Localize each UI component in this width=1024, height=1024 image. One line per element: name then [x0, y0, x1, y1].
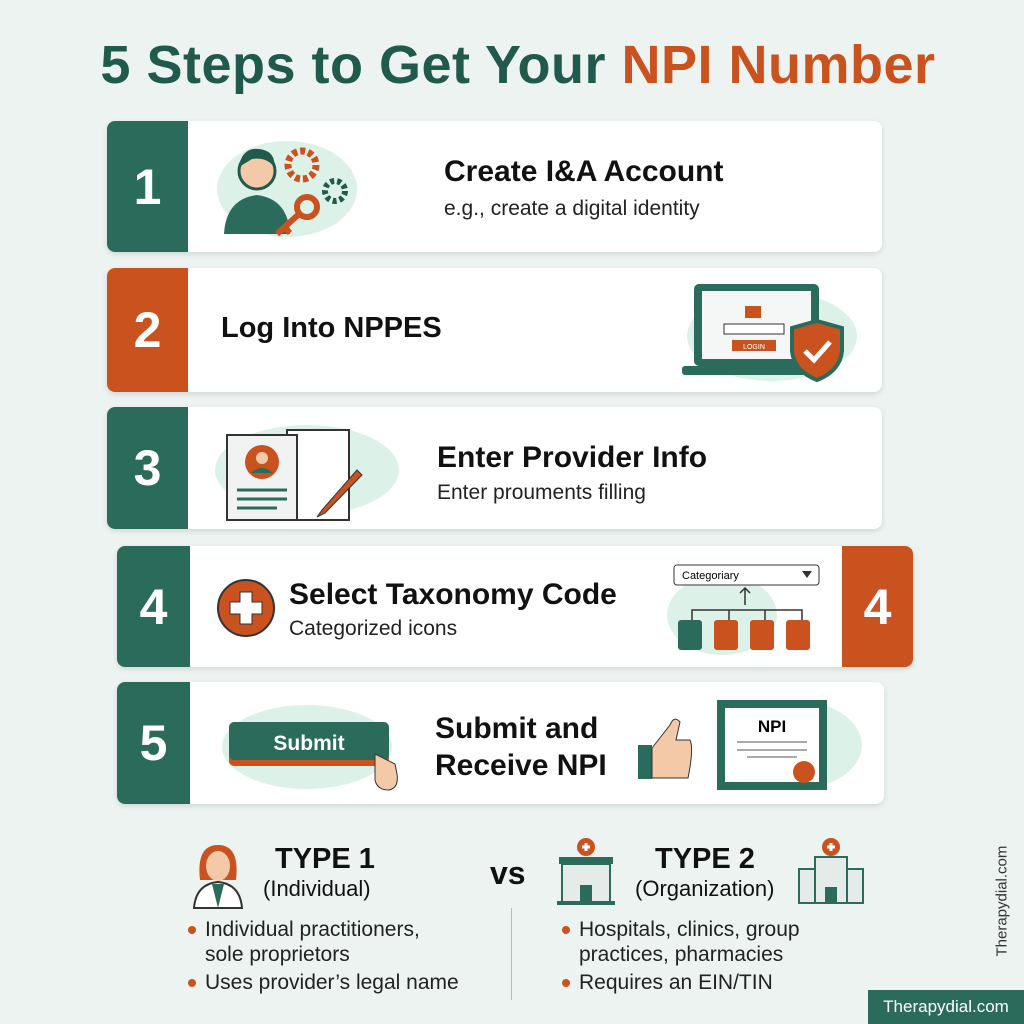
icon: hospital right — [798, 838, 864, 904]
bullets type 1: Individual practitioners, — [205, 918, 420, 941]
icon: hospital left — [557, 838, 615, 905]
bullets type 1: sole proprietors — [205, 943, 350, 966]
panel: type 1: (Individual) — [263, 876, 371, 901]
number 1 — [107, 121, 188, 252]
icon: submit button: Submit — [273, 732, 345, 755]
icon: doctor — [192, 845, 244, 909]
number 4 left — [117, 546, 190, 667]
panel: step 2 — [107, 268, 882, 392]
number 2 — [107, 268, 188, 392]
panel: type 2: (Organization) — [635, 876, 774, 901]
bullets type 2: practices, pharmacies — [579, 943, 783, 966]
panel: type 1: Uses provider’s legal name — [205, 971, 459, 994]
heading 5 — [435, 712, 607, 782]
watermark vertical: Therapydial.com — [994, 846, 1010, 956]
heading 2: Log Into NPPES — [221, 312, 442, 344]
vs: vs — [490, 855, 526, 891]
bullets type 2 — [579, 917, 800, 967]
icon: person with key and gears — [217, 141, 357, 237]
icon: documents and pen — [215, 425, 399, 521]
number 4 right — [842, 546, 913, 667]
subtext 3: Enter prouments filling — [437, 481, 646, 504]
panel: type 2 — [557, 838, 864, 994]
panel: step 5 — [117, 682, 884, 804]
subtext 4: Categorized icons — [289, 617, 457, 640]
icon: submit button — [222, 705, 398, 790]
heading 5: Receive NPI — [435, 749, 607, 782]
heading 3: Enter Provider Info — [437, 441, 707, 474]
icon: laptop with shield — [682, 284, 857, 382]
number 1: 1 — [134, 158, 161, 214]
bullets type 2: Hospitals, clinics, group — [579, 918, 800, 941]
icon: category dropdown tree: Categoriary — [682, 570, 739, 582]
heading type 1: TYPE 1 — [275, 843, 375, 875]
panel: type 1 — [188, 843, 459, 994]
number 3 — [107, 407, 188, 529]
heading 1: Create I&A Account — [444, 155, 724, 188]
panel: type 2: Requires an EIN/TIN — [579, 971, 773, 994]
number 4 left: 4 — [140, 578, 167, 634]
footer badge: Therapydial.com — [883, 997, 1009, 1016]
number 5 — [117, 682, 190, 804]
bullets type 1 — [205, 917, 420, 967]
panel: step 3 — [107, 407, 882, 529]
heading 5: Submit and — [435, 712, 598, 745]
number 3: 3 — [134, 440, 161, 496]
number 4 right: 4 — [864, 578, 891, 634]
panel: step 4 — [117, 546, 913, 667]
panel: step 1 — [107, 121, 882, 252]
icon: thumbs up and certificate — [638, 700, 862, 790]
icon: category dropdown tree — [667, 564, 820, 655]
icon: thumbs up and certificate: NPI — [758, 717, 786, 736]
title: 5 Steps to Get Your NPI Number — [100, 35, 936, 95]
footer badge — [868, 990, 1024, 1024]
number 5: 5 — [140, 715, 167, 771]
icon: laptop with shield: LOGIN — [743, 344, 765, 351]
icon: medical cross — [217, 579, 275, 637]
subtext 1: e.g., create a digital identity — [444, 197, 700, 220]
heading 4: Select Taxonomy Code — [289, 578, 617, 611]
heading type 2: TYPE 2 — [655, 843, 755, 875]
number 2: 2 — [134, 302, 161, 358]
